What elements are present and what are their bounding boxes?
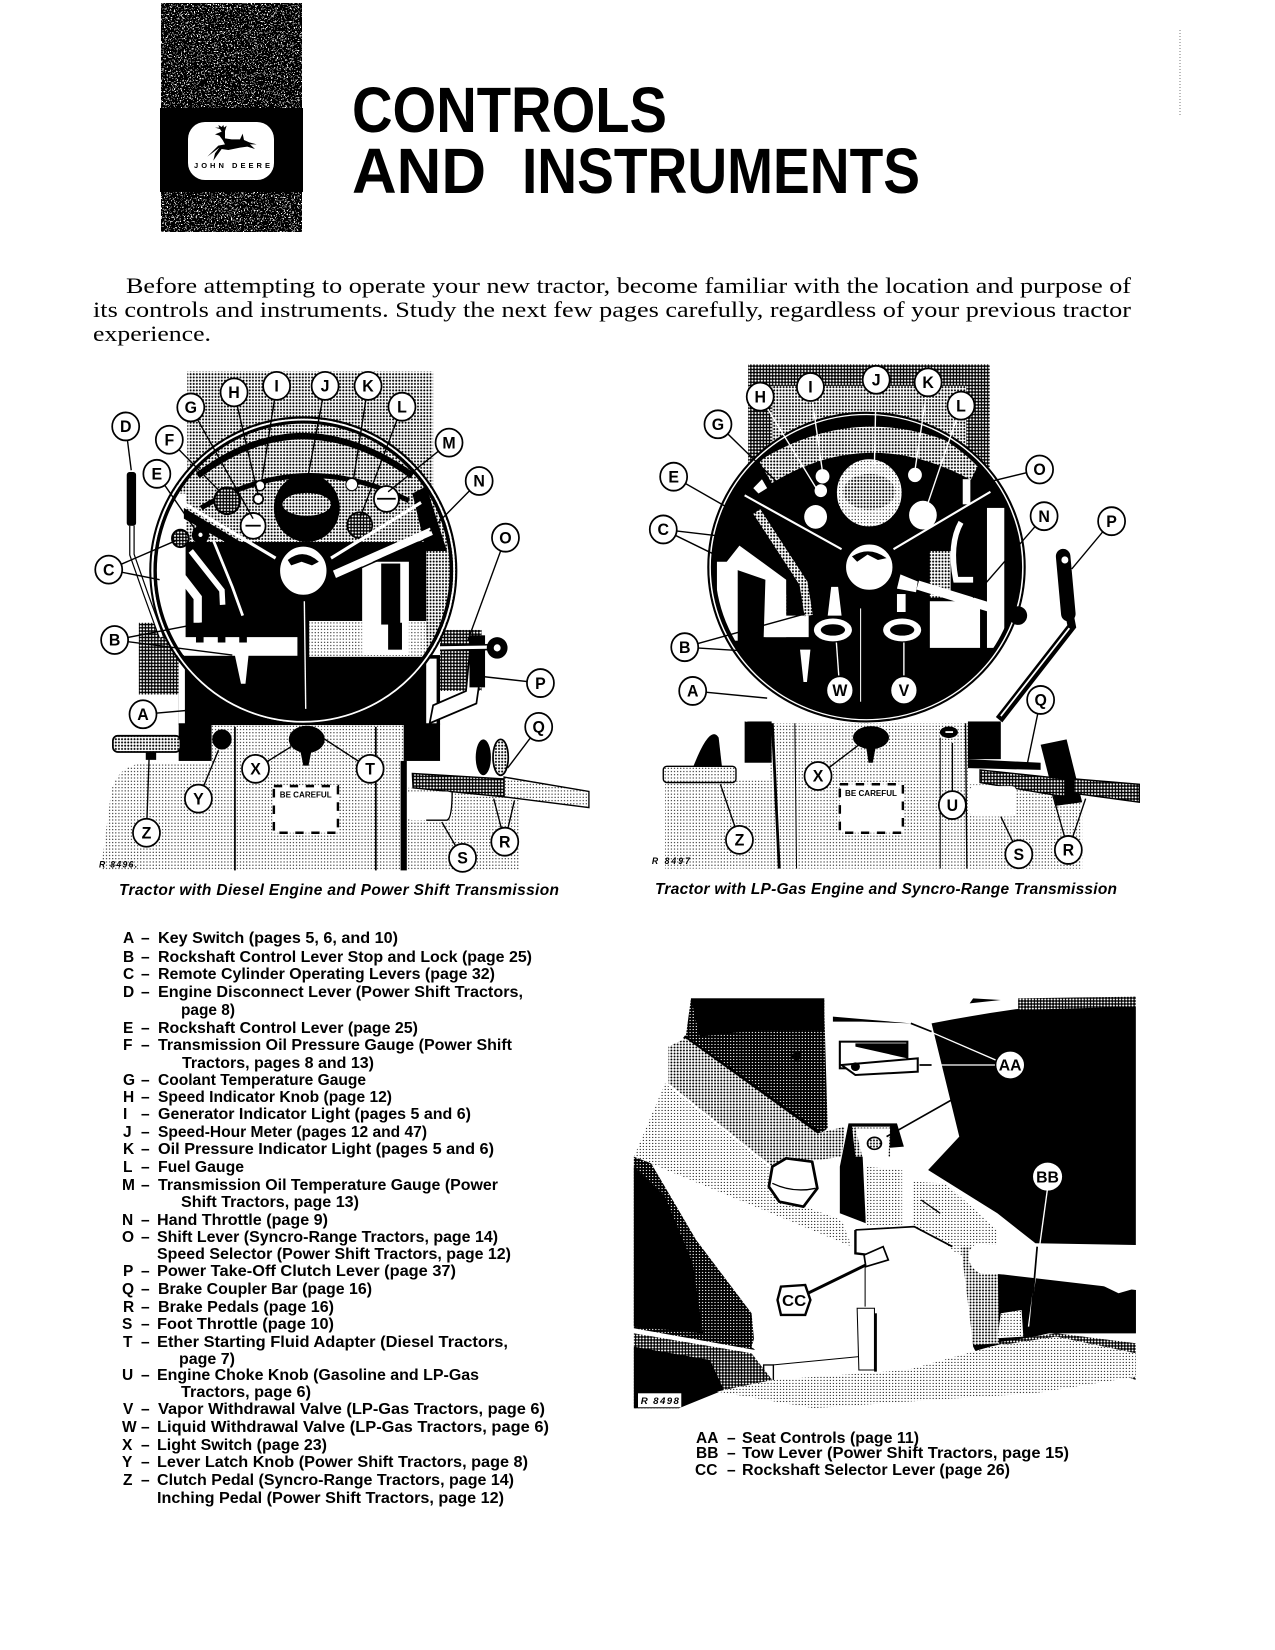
callout: H: H (228, 384, 240, 402)
legend: B: B (123, 949, 134, 966)
legend: Y: Lever Latch Knob (Power Shift Tractors, page 8) (157, 1454, 528, 1471)
legend: AA: – (727, 1430, 736, 1447)
callout: R (491, 799, 518, 856)
intro paragraph: Before attempting to operate your new tractor, become familiar with the location and purpose of (126, 273, 1132, 298)
logo block (160, 3, 303, 232)
callout: X: X (813, 768, 824, 786)
brake pedals and coupler bar (407, 739, 589, 820)
legend: V: Vapor Withdrawal Valve (LP-Gas Tractors, page 6) (158, 1401, 545, 1418)
callout: O: O (499, 529, 512, 548)
callout: D (112, 412, 139, 470)
legend: CC: Rockshaft Selector Lever (page 26) (742, 1462, 1010, 1479)
callout: J: J (872, 371, 881, 390)
warning plate: BE CAREFUL (280, 789, 332, 800)
legend: F (123, 1037, 512, 1072)
legend: N: Hand Throttle (page 9) (157, 1212, 328, 1229)
legend: F: – (141, 1037, 150, 1054)
legend: L: L (123, 1159, 132, 1176)
callout: Y: Y (193, 790, 204, 808)
callout: A (679, 677, 767, 705)
callout: CC (778, 1265, 866, 1315)
legend: U (122, 1367, 479, 1401)
callout: F (156, 426, 218, 490)
callout: N (430, 467, 493, 531)
legend: X: X (122, 1437, 133, 1454)
callout: X (805, 745, 859, 790)
callout: N (973, 502, 1058, 598)
legend: P: P (123, 1263, 133, 1280)
legend: A: Key Switch (pages 5, 6, and 10) (158, 930, 398, 947)
callout: S: S (1014, 846, 1024, 864)
callout: BB: BB (1036, 1170, 1059, 1186)
legend: B: Rockshaft Control Lever Stop and Lock (page 25) (158, 949, 532, 966)
legend: O: – (141, 1229, 150, 1246)
callout: B: B (679, 639, 690, 657)
legend: L (123, 1159, 244, 1176)
light switch and choke knob (853, 726, 958, 763)
callout: P (483, 669, 554, 697)
callout: M (388, 429, 463, 492)
callout: I: I (274, 377, 279, 396)
legend: H: Speed Indicator Knob (page 12) (158, 1089, 392, 1106)
legend: D: page 8) (181, 1002, 235, 1019)
legend: O: O (122, 1229, 134, 1246)
callouts (650, 366, 1125, 868)
legend: D (123, 984, 523, 1019)
legend: Z: Z (123, 1472, 133, 1489)
clutch pedal Z (663, 734, 736, 782)
figure number: R 8498 (641, 1396, 680, 1407)
callout: I: I (808, 378, 813, 397)
panel: LP-gas tractor controls diagram (650, 364, 1139, 869)
legend: K: Oil Pressure Indicator Light (pages 5 and 6) (158, 1141, 494, 1158)
logo block: JOHN DEERE (194, 161, 270, 170)
legend: T: Ether Starting Fluid Adapter (Diesel Tractors, (157, 1334, 508, 1351)
shift lever O knob (440, 635, 508, 687)
callout: Q: Q (1034, 691, 1047, 710)
callout: S (1001, 817, 1032, 868)
legend: S: S (122, 1316, 132, 1333)
legend: J: – (141, 1124, 150, 1141)
filler cap (769, 1158, 817, 1207)
legend: C: – (141, 966, 150, 983)
legend: F: F (123, 1037, 132, 1054)
legend: O (122, 1229, 511, 1263)
callout: X: X (250, 760, 261, 779)
light switch and adapter knob (289, 726, 325, 766)
callout: E (660, 463, 739, 514)
seat plate slot (790, 1017, 918, 1075)
callout: L: L (397, 398, 407, 417)
legend: P: Power Take-Off Clutch Lever (page 37) (157, 1263, 456, 1280)
callout: O: O (1033, 461, 1046, 479)
legend: U: – (141, 1367, 150, 1384)
legend: N: N (122, 1212, 133, 1229)
callout: Z (720, 784, 753, 854)
callout: N: N (473, 472, 485, 491)
callout: Z: Z (142, 824, 151, 843)
lower floor stipple (717, 1337, 1136, 1408)
legend: Q: Brake Coupler Bar (page 16) (158, 1281, 372, 1298)
legend: W: – (141, 1419, 150, 1436)
callout: Q (1027, 686, 1054, 766)
legend: BB: Tow Lever (Power Shift Tractors, page 15) (742, 1445, 1069, 1462)
legend: U: Engine Choke Knob (Gasoline and LP-Gas (157, 1367, 479, 1384)
legend: Z: Clutch Pedal (Syncro-Range Tractors, page 14) (157, 1472, 514, 1489)
callout: R (1053, 795, 1086, 864)
callout: W (826, 643, 853, 704)
legend: G: Coolant Temperature Gauge (158, 1072, 366, 1089)
callout: E: E (152, 465, 162, 484)
intro paragraph: experience. (93, 321, 211, 346)
callout: K (353, 372, 382, 479)
legend: U: U (122, 1367, 133, 1384)
legend: L: Fuel Gauge (158, 1159, 244, 1176)
legend: Q: – (141, 1281, 150, 1298)
legend: V: – (141, 1401, 150, 1418)
legend: G: G (123, 1072, 135, 1089)
callout: G (704, 410, 803, 508)
callout: Z: Z (735, 831, 744, 850)
panel: diesel tractor controls diagram (95, 372, 589, 872)
callout: Z (133, 754, 160, 847)
title (352, 74, 920, 207)
legend: E: Rockshaft Control Lever (page 25) (158, 1020, 418, 1037)
legend: F: Transmission Oil Pressure Gauge (Power Shift (158, 1037, 512, 1054)
callout: R: R (499, 833, 511, 852)
callout: C (95, 540, 177, 584)
legend: O: Speed Selector (Power Shift Tractors, page 12) (157, 1246, 511, 1263)
caption: LP-gas tractor: Tractor with LP-Gas Engine and Syncro-Range Transmission (655, 881, 1117, 898)
callout: P: P (1106, 513, 1117, 531)
legend: W: Liquid Withdrawal Valve (LP-Gas Tractors, page 6) (157, 1419, 549, 1436)
legend: Q: Q (122, 1281, 134, 1298)
legend: T: page 7) (179, 1351, 235, 1368)
legend: G: – (141, 1072, 150, 1089)
callout: H (747, 383, 817, 490)
gauges and lights (804, 459, 937, 529)
legend: BB: BB (696, 1445, 718, 1462)
legend: S: – (141, 1316, 150, 1333)
gauges (214, 474, 399, 542)
callout: M: M (442, 434, 456, 452)
legend: A: A (123, 930, 134, 947)
steering wheel rim (708, 413, 1025, 721)
callout: J (308, 372, 339, 474)
callout: K (915, 368, 942, 470)
callout: J: J (321, 377, 330, 396)
callout: O (973, 456, 1053, 486)
legend: L: – (141, 1159, 150, 1176)
legend: I: I (123, 1106, 127, 1123)
callout: L (928, 392, 975, 503)
callout: H (221, 378, 258, 495)
callout: AA (887, 1023, 1025, 1137)
title: AND (352, 135, 486, 207)
legend: BB: – (727, 1445, 736, 1462)
icon: leaping deer (207, 125, 257, 161)
legend: C: C (123, 966, 134, 983)
callout: U (939, 743, 966, 819)
legend: T: – (141, 1334, 150, 1351)
callout: S (442, 822, 476, 872)
callout: A: A (137, 706, 149, 724)
callout: V (890, 643, 917, 704)
callout: C: C (103, 561, 115, 579)
callout: V: V (899, 682, 909, 700)
brake pedals and coupler bar (968, 739, 1139, 817)
title: INSTRUMENTS (522, 135, 920, 207)
legend: F: Tractors, pages 8 and 13) (182, 1055, 374, 1072)
callout: A (130, 700, 205, 728)
legend: C: Remote Cylinder Operating Levers (page 32) (158, 966, 495, 983)
callout: B: B (109, 631, 120, 650)
legend: I: – (141, 1106, 150, 1123)
legend: M: Shift Tractors, page 13) (181, 1194, 359, 1211)
legend: E: – (141, 1020, 150, 1037)
seat knob bracket (855, 1128, 890, 1157)
callout: S: S (457, 849, 468, 868)
intro paragraph: its controls and instruments. Study the next few pages carefully, regardless of your previous tractor (93, 297, 1132, 322)
legend: Y: Y (122, 1454, 133, 1471)
legend: CC: CC (695, 1462, 717, 1479)
callout: B (101, 616, 241, 655)
callout: B (671, 614, 805, 661)
callout: L: L (956, 397, 966, 415)
callout: U: U (947, 797, 958, 815)
callout: BB (1029, 1163, 1062, 1327)
legend: J: Speed-Hour Meter (pages 12 and 47) (158, 1124, 427, 1141)
legend: AA: AA (696, 1430, 718, 1447)
legend: R: Brake Pedals (page 16) (158, 1299, 334, 1316)
callout: A: A (687, 682, 699, 701)
seat legend list (695, 1430, 1069, 1479)
panel: seat and rockshaft photo (634, 997, 1136, 1408)
legend: M: Transmission Oil Temperature Gauge (Power (158, 1177, 498, 1194)
callout: P (1072, 507, 1125, 569)
callout: H: H (754, 388, 766, 406)
legend: M: – (141, 1177, 150, 1194)
steering wheel interior (708, 413, 1025, 721)
callout: G: G (185, 399, 197, 417)
figure number (638, 1393, 681, 1407)
legend: S: Foot Throttle (page 10) (157, 1316, 334, 1333)
figure number: R 8496. (99, 859, 137, 870)
legend: CC: – (727, 1462, 736, 1479)
legend: H: H (123, 1089, 134, 1106)
callout: I (797, 373, 824, 472)
figure number: R 8497 (652, 856, 691, 866)
legend: Z: – (141, 1472, 150, 1489)
legend: R: R (123, 1299, 134, 1316)
callout: Y (185, 750, 218, 813)
spokes and hub (163, 503, 431, 709)
legend: D: D (123, 984, 134, 1001)
legend: W: W (122, 1419, 137, 1436)
legend: R: – (141, 1299, 150, 1316)
legend: D: Engine Disconnect Lever (Power Shift Tractors, (158, 984, 523, 1001)
callout: I (262, 372, 290, 481)
warning plate (274, 786, 338, 833)
engine disconnect lever (127, 472, 161, 637)
legend: T: T (123, 1334, 133, 1351)
legend: M: M (122, 1177, 135, 1194)
callout: E: E (668, 468, 679, 487)
callout: T (322, 738, 384, 783)
callout: X (242, 747, 291, 783)
legend: H: – (141, 1089, 150, 1106)
legend: Y: – (141, 1454, 150, 1471)
legend: J: J (123, 1124, 132, 1141)
callout: N: N (1038, 508, 1050, 526)
callout: C (650, 515, 731, 560)
legend: M (122, 1177, 498, 1211)
legend: K: – (141, 1141, 150, 1158)
callout: P: P (535, 675, 546, 693)
callout: K: K (362, 377, 374, 396)
intro paragraph (93, 273, 1132, 346)
legend: P: – (141, 1263, 150, 1280)
legend: B: – (141, 949, 150, 966)
callout: F: F (164, 431, 174, 450)
legend: O: Shift Lever (Syncro-Range Tractors, page 14) (157, 1229, 498, 1246)
clutch pedal Z (113, 736, 180, 760)
callout: Q: Q (533, 718, 545, 737)
title: CONTROLS (352, 74, 667, 146)
legend: X: – (141, 1437, 150, 1454)
callout: G (177, 393, 253, 519)
legend: AA: Seat Controls (page 11) (742, 1430, 919, 1447)
callout: R: R (1063, 841, 1074, 860)
legend: D: – (141, 984, 150, 1001)
legend: E: E (123, 1020, 133, 1037)
legend: V: V (123, 1401, 134, 1418)
tow lever bar (969, 1243, 1136, 1293)
callouts (95, 372, 554, 872)
steering wheel rim (150, 417, 456, 724)
callout: CC: CC (782, 1293, 806, 1310)
callout: C: C (658, 521, 669, 539)
caption: diesel tractor: Tractor with Diesel Engine and Power Shift Transmission (119, 882, 559, 899)
callout: AA: AA (999, 1058, 1022, 1075)
callout: D: D (120, 418, 132, 436)
rockshaft lever and linkage (752, 1227, 971, 1382)
legend: X: Light Switch (page 23) (157, 1437, 327, 1454)
legend: U: Tractors, page 6) (181, 1384, 311, 1401)
lever latch knob Y (212, 729, 232, 749)
callout: W: W (832, 682, 848, 700)
legend: I: Generator Indicator Light (pages 5 and 6) (158, 1106, 471, 1123)
controls legend list (122, 930, 549, 1507)
callout: E (143, 460, 198, 533)
legend: N: – (141, 1212, 150, 1229)
PTO lever P (999, 556, 1072, 720)
LP valves W and V (800, 587, 921, 682)
warning plate: BE CAREFUL (845, 788, 897, 798)
legend: T (123, 1334, 508, 1368)
callout: G: G (712, 416, 724, 434)
callout: O (468, 524, 519, 641)
legend: K: K (123, 1141, 135, 1158)
legend: Z: Inching Pedal (Power Shift Tractors, page 12) (157, 1490, 504, 1507)
spokes, hub and throttle (721, 479, 999, 709)
callout: J (863, 366, 890, 465)
callout: Q (508, 713, 552, 768)
legend: A: – (141, 930, 150, 947)
warning plate (840, 784, 903, 833)
callout: K: K (922, 374, 934, 392)
steering wheel interior (149, 418, 457, 723)
callout: L (360, 393, 415, 517)
legend: Z (123, 1472, 514, 1507)
callout: T: T (365, 760, 375, 779)
